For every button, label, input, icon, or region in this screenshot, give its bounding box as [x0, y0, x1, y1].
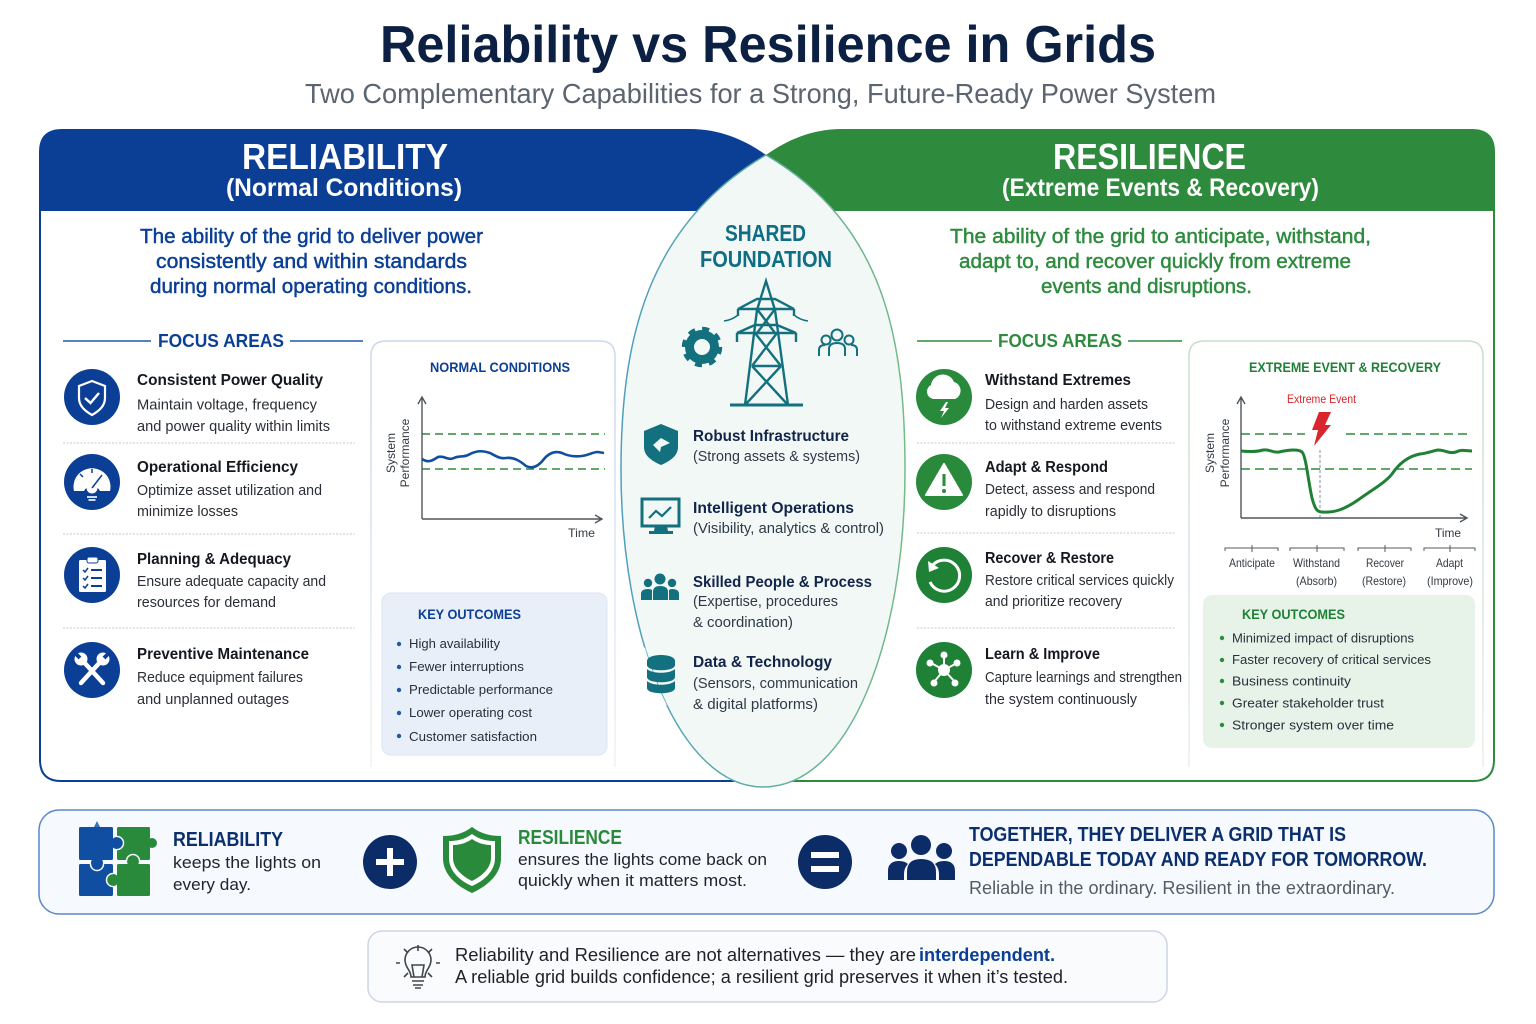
chart: extreme event and recovery: Extreme Event — [1287, 392, 1357, 406]
text: closing note: interdependent. — [919, 945, 1055, 965]
icon: database — [643, 648, 675, 706]
shared item: skilled people and process — [641, 574, 872, 631]
summary: resilience: ensures the lights come back on — [518, 850, 767, 869]
shared item: intelligent operations — [642, 499, 884, 537]
heading: shared foundation: SHARED — [725, 220, 806, 246]
focus item: withstand extremes — [916, 369, 1162, 434]
focus item: withstand extremes: Design and harden assets — [985, 397, 1148, 413]
chart: normal conditions: NORMAL CONDITIONS — [430, 359, 570, 375]
icon: light bulb — [396, 945, 440, 988]
definition: reliability: The ability of the grid to deliver power — [140, 226, 483, 248]
chart: extreme event and recovery: System — [1203, 433, 1217, 473]
summary: together: Reliable in the ordinary. Resilient in the extraordinary. — [969, 878, 1395, 898]
focus item: adapt and respond: Detect, assess and respond — [985, 482, 1155, 498]
focus item: learn and improve: Capture learnings and strengthen — [985, 670, 1182, 686]
shared item: robust infrastructure — [644, 424, 860, 465]
text: closing note — [455, 945, 1068, 987]
chart: extreme event and recovery: Performance — [1218, 418, 1232, 487]
shared item: data and technology — [643, 648, 858, 713]
focus item: preventive maintenance: Reduce equipment failures — [137, 670, 303, 686]
focus item: planning and adequacy — [64, 547, 326, 611]
icon: gear — [684, 329, 720, 365]
icon: puzzle — [79, 821, 157, 896]
icon: warning triangle — [916, 454, 972, 510]
shared item: data and technology: & digital platforms) — [693, 697, 818, 713]
icon: crossed tools — [64, 642, 120, 698]
focus item: operational efficiency: minimize losses — [137, 504, 238, 520]
heading: reliability — [226, 136, 462, 202]
shared item: skilled people and process: Skilled People & Process — [693, 574, 872, 591]
focus item: adapt and respond: Adapt & Respond — [985, 459, 1108, 476]
heading: resilience: (Extreme Events & Recovery) — [1002, 174, 1319, 202]
heading: focus areas reliability: FOCUS AREAS — [158, 330, 284, 351]
focus item: consistent power quality: Maintain voltage, frequency — [137, 398, 318, 414]
focus item: learn and improve: Learn & Improve — [985, 646, 1100, 663]
summary: reliability: keeps the lights on — [173, 853, 321, 872]
focus item: learn and improve: the system continuously — [985, 692, 1138, 708]
panel: key outcomes resilience — [1203, 595, 1475, 748]
panel: closing note — [368, 931, 1167, 1002]
header: reliability band — [39, 129, 766, 211]
chart: extreme event and recovery: (Absorb) — [1296, 574, 1337, 588]
icon: network hub — [916, 642, 972, 698]
chart: extreme event and recovery: EXTREME EVENT & RECOVERY — [1249, 359, 1442, 375]
icon: storm cloud — [916, 369, 972, 425]
focus item: operational efficiency: Operational Efficiency — [137, 459, 298, 476]
heading: shared foundation: FOUNDATION — [700, 246, 832, 272]
heading: reliability: RELIABILITY — [242, 136, 448, 177]
definition: reliability: during normal operating conditions. — [150, 276, 472, 298]
chart: extreme event and recovery: Adapt — [1436, 556, 1464, 570]
summary: resilience: quickly when it matters most. — [518, 871, 747, 890]
chart: extreme event and recovery: Anticipate — [1229, 556, 1275, 570]
focus item: planning and adequacy: Planning & Adequacy — [137, 551, 291, 568]
summary: resilience: RESILIENCE — [518, 827, 622, 849]
summary: resilience — [518, 827, 767, 890]
focus item: recover and restore — [916, 547, 1175, 610]
icon: equals — [798, 835, 852, 889]
focus item: adapt and respond: rapidly to disruptions — [985, 504, 1116, 520]
panel: key outcomes reliability — [382, 593, 607, 755]
focus item: adapt and respond — [916, 454, 1155, 520]
icon: people solid — [641, 574, 679, 600]
shared item: skilled people and process: (Expertise, procedures — [693, 594, 838, 610]
chart: extreme event and recovery: Withstand — [1293, 556, 1340, 570]
panel: key outcomes reliability: High availability — [409, 636, 500, 651]
icon: people outline — [819, 330, 857, 356]
panel: key outcomes reliability: Lower operating cost — [409, 705, 532, 720]
heading: resilience: RESILIENCE — [1053, 136, 1246, 177]
title: Reliability vs Resilience in Grids — [380, 16, 1156, 74]
icon: transmission tower — [724, 281, 808, 405]
chart: extreme event and recovery: Time — [1435, 526, 1461, 540]
focus item: preventive maintenance: and unplanned outages — [137, 692, 289, 708]
panel: extreme event chart card — [1189, 341, 1483, 767]
focus item: preventive maintenance — [64, 642, 309, 708]
chart: extreme event and recovery: Recover — [1366, 556, 1404, 570]
panel: key outcomes reliability: KEY OUTCOMES — [418, 606, 521, 622]
summary: reliability — [173, 829, 321, 894]
chart: normal conditions: System — [384, 433, 398, 473]
chart: extreme event and recovery — [1203, 359, 1475, 588]
shared item: skilled people and process: & coordination) — [693, 615, 793, 631]
shared item: intelligent operations: (Visibility, analytics & control) — [693, 521, 884, 537]
definition: resilience: The ability of the grid to anticipate, withstand, — [950, 226, 1371, 248]
icon: monitor chart — [642, 499, 679, 534]
heading: focus areas resilience: FOCUS AREAS — [998, 330, 1122, 351]
chart: normal conditions: Time — [568, 526, 595, 540]
panel: shared foundation ellipse — [621, 155, 905, 787]
focus item: consistent power quality: and power quality within limits — [137, 419, 330, 435]
icon: circular arrow — [916, 547, 972, 603]
focus item: consistent power quality: Consistent Power Quality — [137, 372, 323, 389]
focus item: recover and restore: Restore critical services quickly — [985, 573, 1175, 589]
subtitle: Two Complementary Capabilities for a Strong, Future-Ready Power System — [305, 78, 1216, 109]
panel: key outcomes reliability: Fewer interruptions — [409, 659, 525, 674]
panel: summary band — [39, 810, 1494, 914]
text: closing note: Reliability and Resilience are not alternatives — they are — [455, 945, 916, 965]
summary: reliability: every day. — [173, 875, 251, 894]
panel: key outcomes resilience: Business continuity — [1232, 674, 1352, 688]
focus item: planning and adequacy: resources for demand — [137, 595, 276, 611]
definition: reliability: consistently and within standards — [156, 251, 467, 273]
heading: reliability: (Normal Conditions) — [226, 174, 462, 202]
shared item: data and technology: Data & Technology — [693, 654, 832, 671]
header: resilience band — [766, 129, 1495, 211]
icon: people navy — [888, 835, 955, 880]
shared item: robust infrastructure: (Strong assets & systems) — [693, 449, 860, 465]
icon: shield check — [64, 369, 120, 425]
summary: together — [969, 824, 1427, 898]
focus item: operational efficiency — [64, 454, 322, 520]
focus item: recover and restore: Recover & Restore — [985, 550, 1114, 567]
focus item: withstand extremes: to withstand extreme events — [985, 418, 1162, 434]
panel: normal conditions chart card — [371, 341, 615, 767]
chart: extreme event and recovery: (Improve) — [1427, 574, 1473, 588]
icon: gauge — [64, 454, 120, 510]
heading: resilience — [1002, 136, 1319, 202]
panel: key outcomes resilience: Stronger system over time — [1232, 718, 1394, 732]
shared item: intelligent operations: Intelligent Operations — [693, 500, 854, 517]
summary: together: DEPENDABLE TODAY AND READY FOR TOMORROW. — [969, 849, 1427, 871]
shared item: data and technology: (Sensors, communication — [693, 676, 858, 692]
focus item: preventive maintenance: Preventive Maintenance — [137, 646, 309, 663]
shared item: robust infrastructure: Robust Infrastructure — [693, 428, 849, 445]
chart: normal conditions — [384, 359, 605, 540]
panel: key outcomes reliability: Predictable performance — [409, 682, 553, 697]
summary: reliability: RELIABILITY — [173, 829, 284, 851]
panel: key outcomes resilience: Minimized impact of disruptions — [1232, 630, 1414, 646]
icon: green shield — [443, 827, 501, 893]
focus item: consistent power quality — [64, 369, 330, 435]
icon: plus — [363, 835, 417, 889]
text: closing note: A reliable grid builds confidence; a resilient grid preserves it when it’s tested. — [455, 967, 1068, 987]
chart: normal conditions: Performance — [398, 418, 412, 487]
panel: body outline — [40, 211, 1494, 781]
panel: key outcomes resilience: KEY OUTCOMES — [1242, 606, 1345, 622]
panel: key outcomes reliability: Customer satisfaction — [409, 729, 537, 744]
definition: resilience: events and disruptions. — [1041, 276, 1252, 298]
focus item: planning and adequacy: Ensure adequate capacity and — [137, 574, 326, 590]
summary: together: TOGETHER, THEY DELIVER A GRID THAT IS — [969, 824, 1346, 846]
panel: key outcomes resilience: Greater stakeholder trust — [1232, 696, 1384, 710]
heading: shared foundation — [700, 220, 832, 272]
definition: reliability — [140, 226, 483, 298]
icon: shield — [644, 424, 678, 465]
focus item: recover and restore: and prioritize recovery — [985, 594, 1123, 610]
definition: resilience — [950, 226, 1371, 298]
focus item: withstand extremes: Withstand Extremes — [985, 372, 1131, 389]
icon: clipboard — [64, 547, 120, 603]
focus item: operational efficiency: Optimize asset utilization and — [137, 483, 322, 499]
definition: resilience: adapt to, and recover quickly from extreme — [959, 251, 1351, 273]
panel: key outcomes resilience: Faster recovery of critical services — [1232, 652, 1431, 667]
focus item: learn and improve — [916, 642, 1182, 708]
chart: extreme event and recovery: (Restore) — [1362, 574, 1406, 588]
